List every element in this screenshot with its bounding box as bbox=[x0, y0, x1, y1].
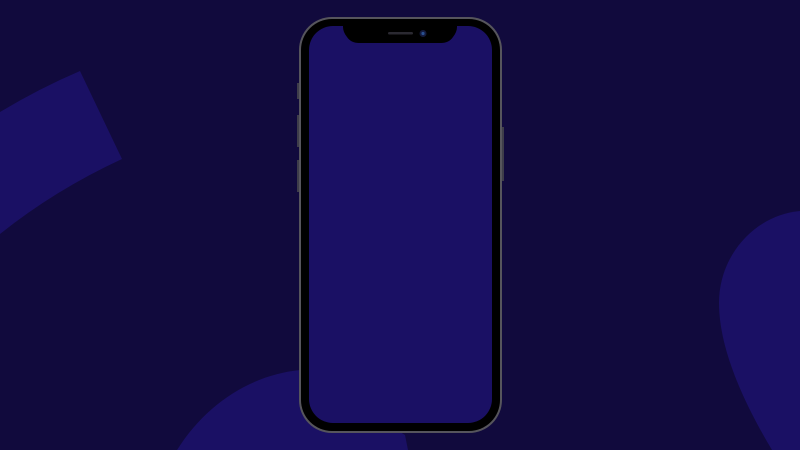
phone bezel bbox=[301, 19, 500, 431]
camera bbox=[420, 30, 426, 37]
phone frame bbox=[299, 17, 502, 433]
decorative shape: bottom blob bbox=[177, 370, 408, 450]
side button: right bbox=[502, 127, 504, 181]
speaker bbox=[388, 32, 413, 34]
decorative shape: right blob bbox=[719, 211, 800, 450]
notch bbox=[343, 25, 457, 43]
decorative shape: left curved band bbox=[0, 71, 122, 234]
side buttons: left bbox=[297, 83, 299, 192]
phone screen bbox=[309, 26, 492, 423]
phone mockup bbox=[297, 17, 504, 433]
